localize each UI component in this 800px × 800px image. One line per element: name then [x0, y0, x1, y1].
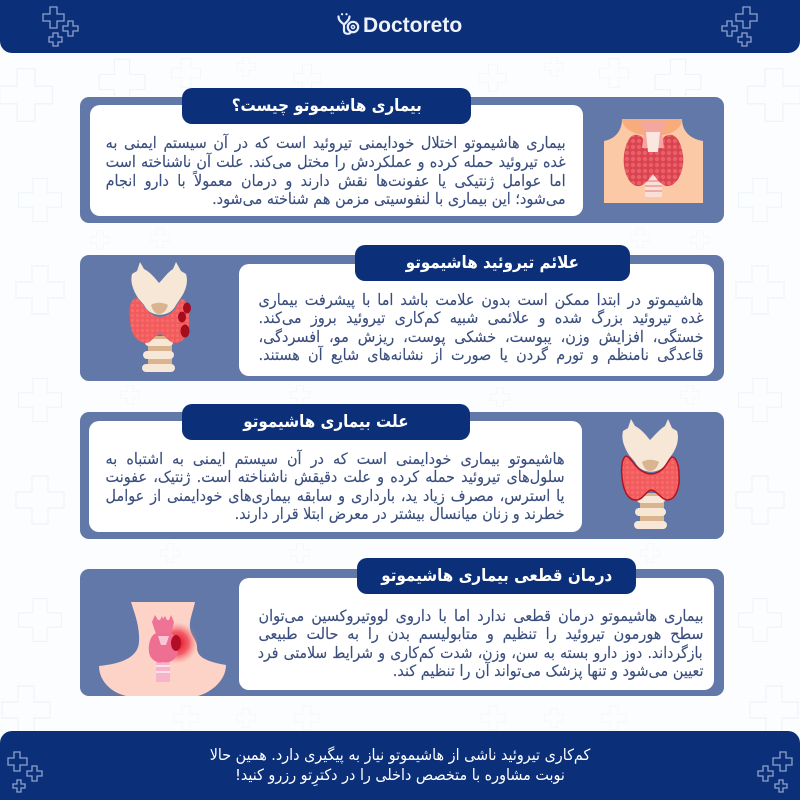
icon: stethoscope logo: [337, 13, 360, 35]
heading 4: درمان قطعی بیماری هاشیموتو: [381, 566, 612, 586]
heading 3: علت بیماری هاشیموتو: [243, 412, 409, 432]
text block 3: خطرند و زنان میانسال بیشتر در معرض ابتلا قرار دارند.: [235, 505, 565, 523]
text block 1: اما عوامل ژنتیکی یا عفونت‌ها نقش دارند و درمان معمولاً با دارو انجام: [106, 172, 566, 190]
text block 4: [258, 607, 704, 680]
text block 4: سطح هورمون تیروئید را تنظیم و متابولیسم بدن را به حالت طبیعی: [258, 625, 703, 643]
text block 3: یا استرس، مصرف زیاد ید، بارداری و سابقه بیماری‌های خودایمنی از عوامل: [106, 487, 565, 505]
text block 4: بیماری هاشیموتو درمان قطعی ندارد اما با داروی لووتیروکسین می‌توان: [258, 607, 703, 625]
icon: left header crosses: [42, 6, 79, 47]
text block 3: سلول‌های تیروئید حمله کرده و علت دقیقش ناشناخته است. ژنتیک، عفونت: [106, 468, 565, 486]
icon: left footer crosses: [7, 751, 43, 793]
header bar: [0, 0, 800, 53]
illustration: neck with pain: [99, 602, 226, 696]
text block 1: بیماری هاشیموتو اختلال خودایمنی تیروئید است که در آن سیستم ایمنی به: [106, 134, 566, 152]
heading 3: [182, 404, 470, 440]
text block 3: [106, 449, 565, 524]
panel: treatment: [80, 569, 724, 696]
heading 1: [182, 88, 471, 124]
illustration: inflamed thyroid: [620, 419, 680, 529]
panel: cause: [80, 412, 724, 539]
text card 1: [90, 105, 583, 216]
call to action text: نوبت مشاوره با متخصص داخلی را در دکترِتو رزرو کنید!: [235, 766, 565, 784]
footer bar: [0, 731, 800, 800]
text block 1: [106, 133, 566, 208]
panel: symptoms: [80, 255, 724, 381]
panel: what is Hashimoto: [80, 97, 724, 223]
icon: right footer crosses: [757, 751, 793, 793]
call to action text: [210, 746, 590, 786]
text block 1: غده تیروئید حمله کرده و عملکردش را مختل می‌کند. علت آن ناشناخته است: [106, 153, 566, 171]
heading 1: بیماری هاشیموتو چیست؟: [231, 96, 422, 116]
icon: right header crosses: [721, 6, 758, 47]
heading 2: علائم تیروئید هاشیموتو: [406, 253, 579, 273]
heading 2: [355, 245, 630, 281]
text block 1: می‌شود؛ این بیماری با لنفوسیتی مزمن هم شناخته می‌شود.: [212, 190, 566, 208]
text card 4: [239, 578, 714, 690]
illustration: thyroid in neck: [604, 119, 703, 203]
illustration: thyroid with nodules: [130, 262, 191, 372]
text block 2: غده تیروئید بزرگ شده و علائمی شبیه کم‌کاری تیروئید بروز می‌کند.: [258, 309, 703, 327]
text block 2: هاشیموتو در ابتدا ممکن است بدون علامت باشد اما با پیشرفت بیماری: [258, 291, 703, 309]
text card 3: [89, 421, 582, 532]
text block 2: قاعدگی نامنظم و تورم گردن یا صورت از نشانه‌های شایع آن هستند.: [258, 346, 703, 364]
text block 3: هاشیموتو بیماری خودایمنی است که در آن سیستم ایمنی به اشتباه به: [106, 450, 565, 468]
heading 4: [357, 558, 636, 594]
call to action text: کم‌کاری تیروئید ناشی از هاشیموتو نیاز به پیگیری دارد. همین حالا: [210, 746, 590, 764]
text block 2: خستگی، افزایش وزن، یبوست، خشکی پوست، ریزش مو، افسردگی،: [258, 328, 703, 346]
text block 4: تعیین می‌شود و تنها پزشک می‌تواند آن را تنظیم کند.: [392, 662, 703, 680]
logo wordmark: Doctoreto: [363, 14, 462, 37]
text block 4: بازگرداند. دوز دارو بسته به سن، وزن، شدت کم‌کاری و شرایط سلامتی فرد: [258, 644, 703, 662]
text card 2: [239, 264, 714, 376]
text block 2: [258, 291, 704, 364]
